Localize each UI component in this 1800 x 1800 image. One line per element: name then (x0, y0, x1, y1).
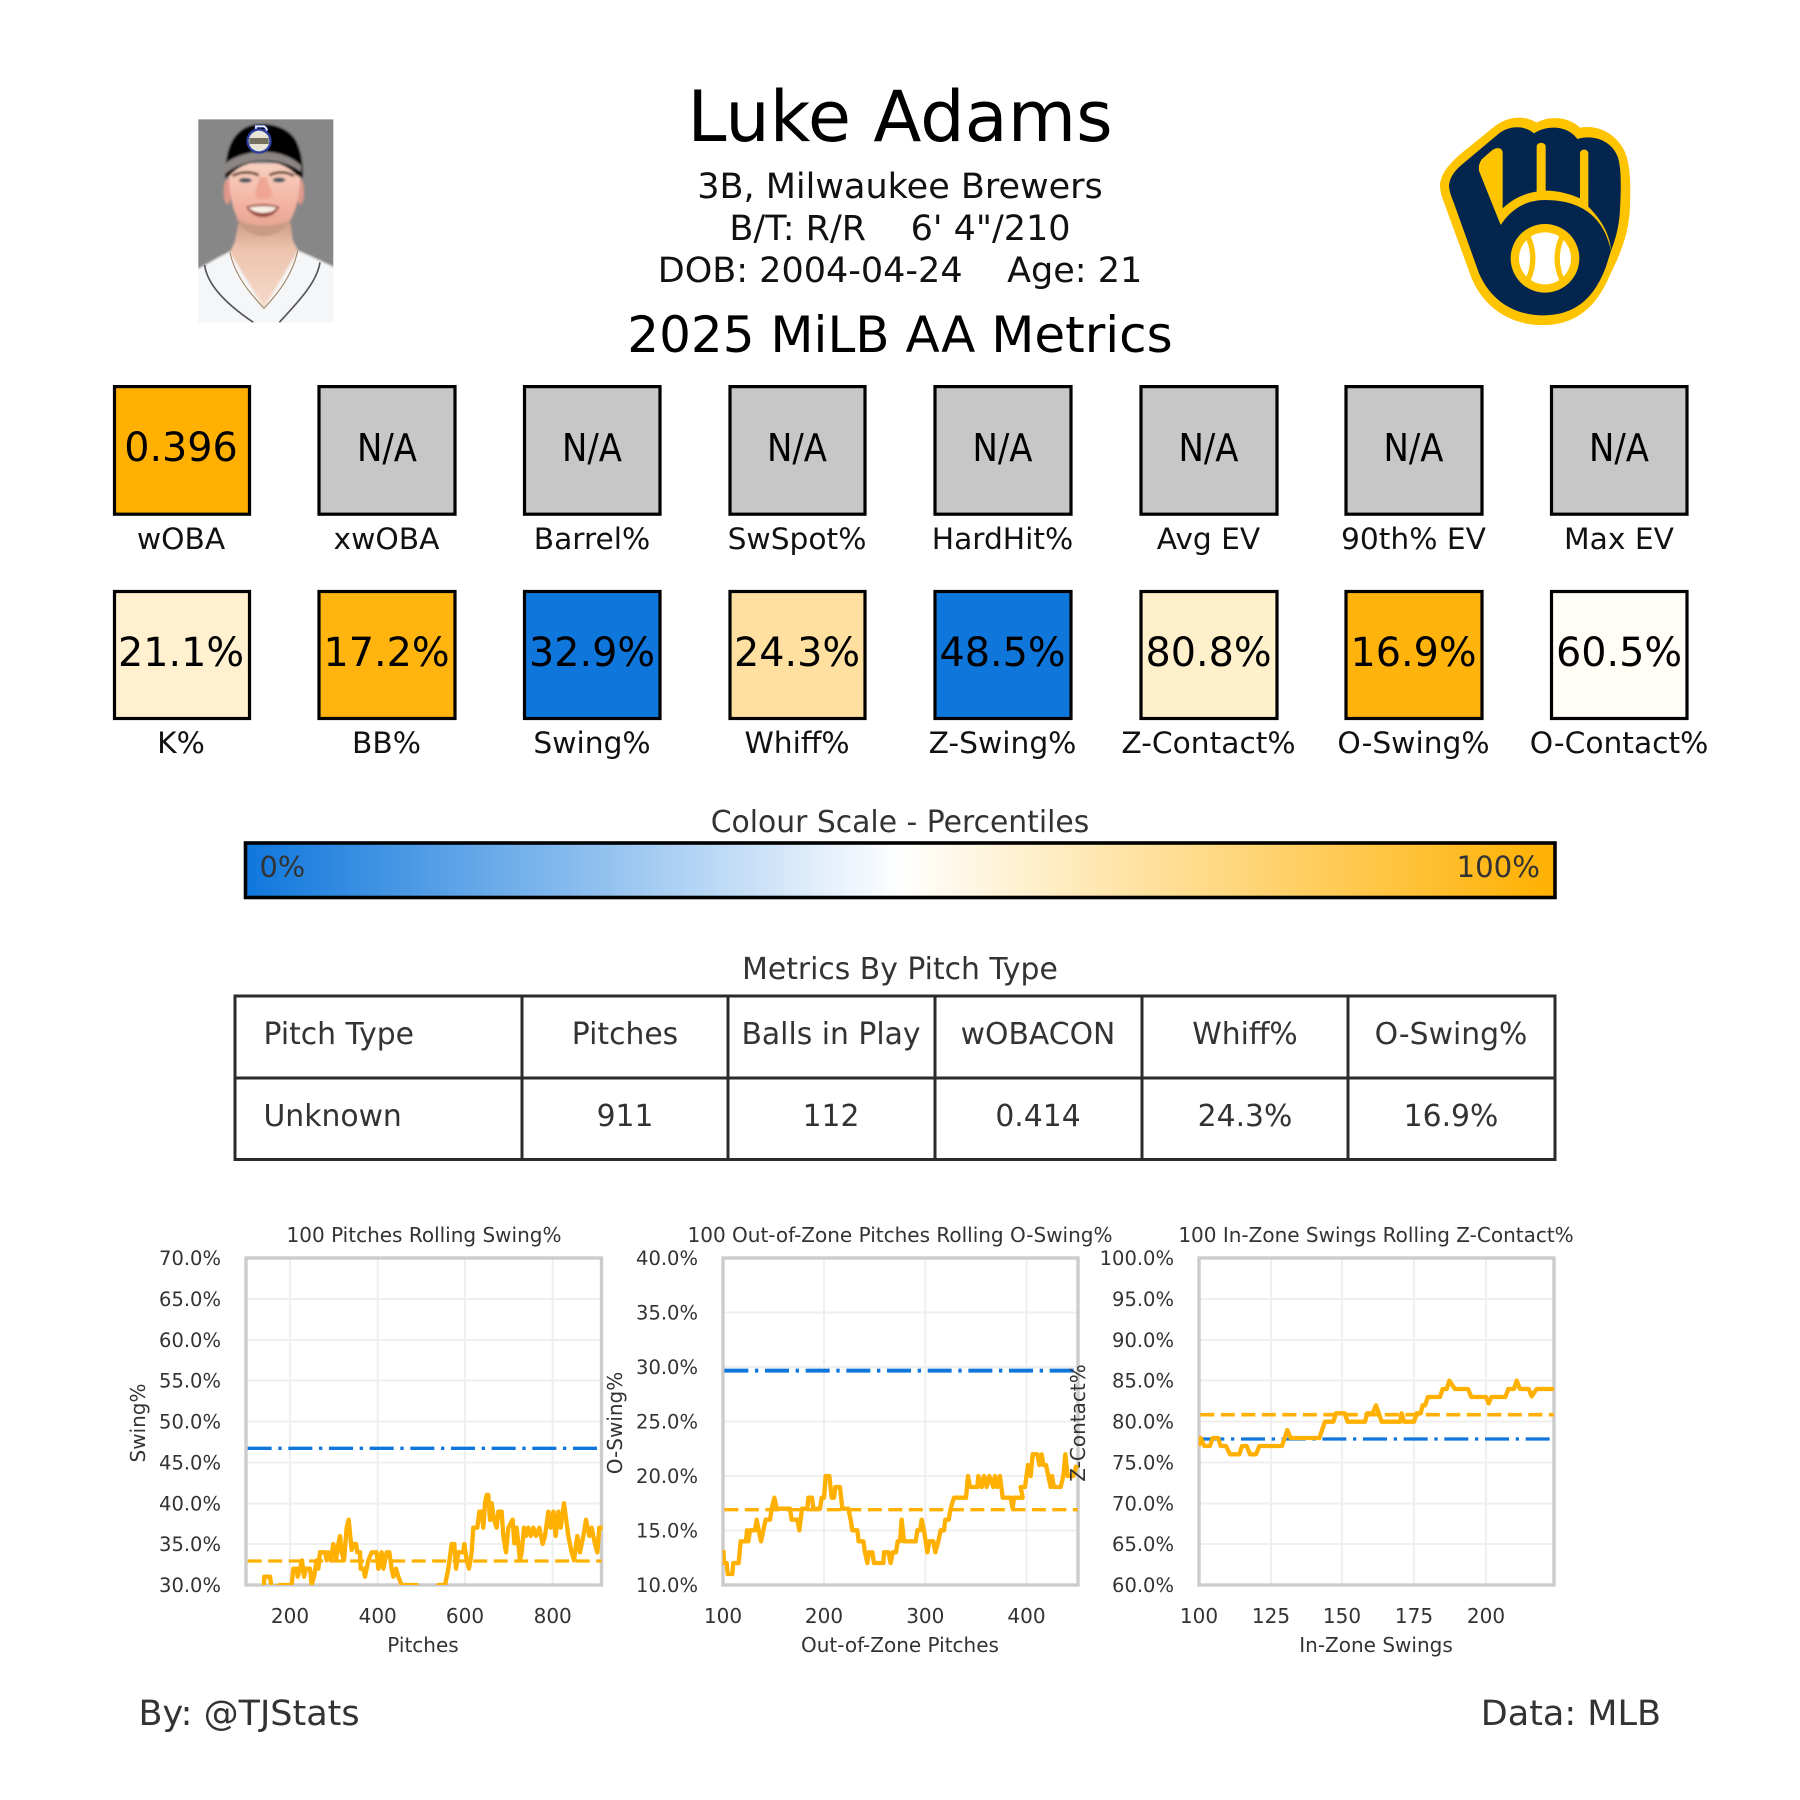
chart: rolling Z-Contact%: 200 (1467, 1604, 1505, 1628)
table: metrics by pitch type: Pitches (572, 1017, 678, 1052)
metric tile: wOBA (114, 387, 250, 557)
metric tile: BB% (319, 592, 455, 761)
metric tile: O-Swing%: 16.9% (1350, 630, 1477, 676)
chart: rolling Z-Contact%: 100.0% (1100, 1247, 1174, 1270)
metric tile: Max EV: N/A (1589, 426, 1649, 470)
metric tile: xwOBA: xwOBA (334, 522, 440, 557)
metric tile: K%: K% (157, 726, 205, 761)
chart: rolling Swing% (126, 1223, 603, 1657)
chart: rolling Z-Contact%: 100 (1180, 1604, 1218, 1628)
metric tile: K% (114, 592, 250, 761)
chart: rolling Swing%: 100 Pitches Rolling Swing% (287, 1223, 561, 1247)
table: metrics by pitch type (235, 996, 1555, 1160)
table: metrics by pitch type: Whiff% (1192, 1017, 1298, 1052)
chart: rolling O-Swing%: 100 (704, 1604, 742, 1628)
chart: rolling Z-Contact%: 175 (1395, 1604, 1433, 1628)
colour scale bar: 0% (260, 850, 305, 884)
table: metrics by pitch type: 112 (803, 1099, 859, 1134)
chart: rolling O-Swing%: O-Swing% (603, 1372, 627, 1474)
metric tile: Avg EV: Avg EV (1157, 522, 1261, 557)
chart: rolling Swing%: 50.0% (159, 1410, 221, 1434)
metric tile: O-Contact%: O-Contact% (1530, 726, 1708, 761)
chart: rolling Z-Contact%: 60.0% (1112, 1574, 1174, 1597)
metric tile: O-Swing% (1337, 592, 1490, 761)
metric tile: Z-Swing% (929, 592, 1076, 761)
colour scale bar (246, 843, 1555, 898)
chart: rolling O-Swing%: 35.0% (636, 1302, 698, 1324)
metric tile: Z-Contact%: Z-Contact% (1121, 726, 1296, 761)
chart: rolling O-Swing%: 30.0% (636, 1356, 698, 1379)
table: metrics by pitch type: O-Swing% (1375, 1017, 1527, 1052)
chart: rolling O-Swing% (603, 1223, 1112, 1657)
metric tile: SwSpot% (728, 387, 866, 557)
metric tile: xwOBA (319, 387, 455, 557)
chart: rolling Swing%: 55.0% (159, 1370, 221, 1392)
metric tile: O-Contact% (1530, 592, 1708, 761)
metric tile: Z-Swing%: 48.5% (939, 630, 1066, 676)
chart: rolling Z-Contact% (1066, 1223, 1574, 1657)
table: metrics by pitch type: 24.3% (1198, 1099, 1292, 1134)
player position and team: 3B, Milwaukee Brewers (697, 167, 1103, 207)
metric tile: 90th% EV (1341, 387, 1487, 557)
table heading: Metrics By Pitch Type (742, 952, 1058, 987)
metric tile: Swing%: Swing% (533, 726, 651, 761)
metric tile: xwOBA: N/A (357, 426, 417, 470)
chart: rolling Swing%: Swing% (126, 1384, 150, 1462)
metric tile: 90th% EV: 90th% EV (1341, 522, 1487, 557)
chart: rolling O-Swing%: Out-of-Zone Pitches (801, 1633, 999, 1657)
table: metrics by pitch type: 16.9% (1404, 1099, 1498, 1134)
colour scale heading: Colour Scale - Percentiles (711, 805, 1089, 840)
metric tile: O-Contact%: 60.5% (1556, 630, 1682, 676)
metric tile: wOBA: wOBA (137, 522, 226, 557)
icon: Brewers ball-in-glove logo (1440, 118, 1630, 325)
metric tile: Barrel% (524, 387, 660, 557)
chart: rolling Z-Contact%: 100 In-Zone Swings Rolling Z-Contact% (1178, 1223, 1574, 1247)
table: metrics by pitch type: 0.414 (995, 1099, 1081, 1134)
metric tile: Avg EV: N/A (1178, 426, 1238, 470)
table: metrics by pitch type: Balls in Play (741, 1017, 921, 1052)
chart: rolling O-Swing%: 25.0% (636, 1410, 698, 1434)
metric tile: Z-Contact%: 80.8% (1145, 630, 1272, 676)
metric tile: Swing% (524, 592, 660, 761)
metric tile: Whiff%: Whiff% (744, 726, 850, 761)
chart: rolling Z-Contact%: 75.0% (1112, 1452, 1174, 1474)
chart: rolling Z-Contact%: 80.0% (1112, 1410, 1174, 1434)
chart: rolling Swing%: 40.0% (159, 1492, 221, 1516)
chart: rolling Z-Contact%: 70.0% (1112, 1492, 1174, 1516)
chart: rolling Z-Contact%: 125 (1252, 1604, 1290, 1628)
chart: rolling Swing%: 45.0% (159, 1452, 221, 1474)
chart: rolling O-Swing%: 100 Out-of-Zone Pitches Rolling O-Swing% (688, 1223, 1112, 1247)
metric tile: Swing%: 32.9% (529, 630, 655, 676)
table: metrics by pitch type: Unknown (264, 1099, 402, 1134)
colour scale bar: 100% (1457, 850, 1540, 884)
metric tile: Z-Swing%: Z-Swing% (929, 726, 1076, 761)
chart: rolling O-Swing%: 10.0% (636, 1574, 698, 1597)
chart: rolling Z-Contact%: 85.0% (1112, 1370, 1174, 1392)
chart: rolling Z-Contact%: 95.0% (1112, 1288, 1174, 1311)
table: metrics by pitch type: Pitch Type (264, 1017, 414, 1052)
chart: rolling Swing%: 60.0% (159, 1329, 221, 1352)
chart: rolling Swing%: 70.0% (159, 1247, 221, 1270)
chart: rolling O-Swing%: 20.0% (636, 1465, 698, 1488)
chart: rolling O-Swing%: 300 (906, 1604, 944, 1628)
metric tile: SwSpot%: SwSpot% (728, 522, 866, 557)
metric tile: SwSpot%: N/A (767, 426, 827, 470)
bats throws height weight: B/T: R/R 6' 4"/210 (729, 209, 1071, 249)
chart: rolling O-Swing%: 40.0% (636, 1247, 698, 1270)
chart: rolling Swing%: 35.0% (159, 1533, 221, 1556)
metric tile: 90th% EV: N/A (1384, 426, 1444, 470)
chart: rolling Swing%: 65.0% (159, 1288, 221, 1311)
chart: rolling Swing%: 600 (446, 1604, 484, 1628)
footer: author credit: By: @TJStats (138, 1694, 360, 1734)
metric tile: HardHit%: N/A (972, 426, 1032, 470)
metric tile: K%: 21.1% (118, 630, 244, 676)
metric tile: Max EV (1552, 387, 1687, 557)
chart: rolling Swing%: 400 (359, 1604, 397, 1628)
player name title: Luke Adams (687, 76, 1113, 158)
chart: rolling Z-Contact%: In-Zone Swings (1299, 1633, 1453, 1657)
chart: rolling Z-Contact%: 65.0% (1112, 1533, 1174, 1556)
metric tile: wOBA: 0.396 (124, 425, 238, 471)
footer: data source: Data: MLB (1481, 1694, 1661, 1734)
metric tile: Barrel%: N/A (562, 426, 622, 470)
metric tile: BB%: BB% (352, 726, 421, 761)
chart: rolling Z-Contact%: 150 (1323, 1604, 1361, 1628)
chart: rolling O-Swing%: 15.0% (636, 1520, 698, 1542)
chart: rolling O-Swing%: 200 (805, 1604, 843, 1628)
metric tile: Z-Contact% (1121, 592, 1296, 761)
chart: rolling Z-Contact%: Z-Contact% (1066, 1364, 1090, 1482)
chart: rolling Swing%: 800 (534, 1604, 572, 1628)
table: metrics by pitch type: 911 (597, 1099, 653, 1134)
chart: rolling Swing%: 30.0% (159, 1574, 221, 1597)
chart: rolling Swing%: Pitches (387, 1633, 459, 1657)
metric tile: Whiff%: 24.3% (734, 630, 860, 676)
metric tile: HardHit% (932, 387, 1073, 557)
date of birth and age: DOB: 2004-04-24 Age: 21 (658, 251, 1142, 291)
chart: rolling O-Swing%: 400 (1007, 1604, 1046, 1628)
metric tile: Whiff% (730, 592, 865, 761)
chart: rolling Swing%: 200 (271, 1604, 309, 1628)
metric tile: O-Swing%: O-Swing% (1337, 726, 1490, 761)
table: metrics by pitch type: wOBACON (961, 1017, 1115, 1052)
metric tile: Max EV: Max EV (1564, 522, 1675, 557)
section heading: season metrics: 2025 MiLB AA Metrics (627, 306, 1173, 364)
chart: rolling Z-Contact%: 90.0% (1112, 1329, 1174, 1352)
player headshot photo (195, 116, 337, 327)
metric tile: BB%: 17.2% (323, 630, 450, 676)
metric tile: Barrel%: Barrel% (534, 522, 650, 557)
metric tile: HardHit%: HardHit% (932, 522, 1073, 557)
metric tile: Avg EV (1141, 387, 1277, 557)
